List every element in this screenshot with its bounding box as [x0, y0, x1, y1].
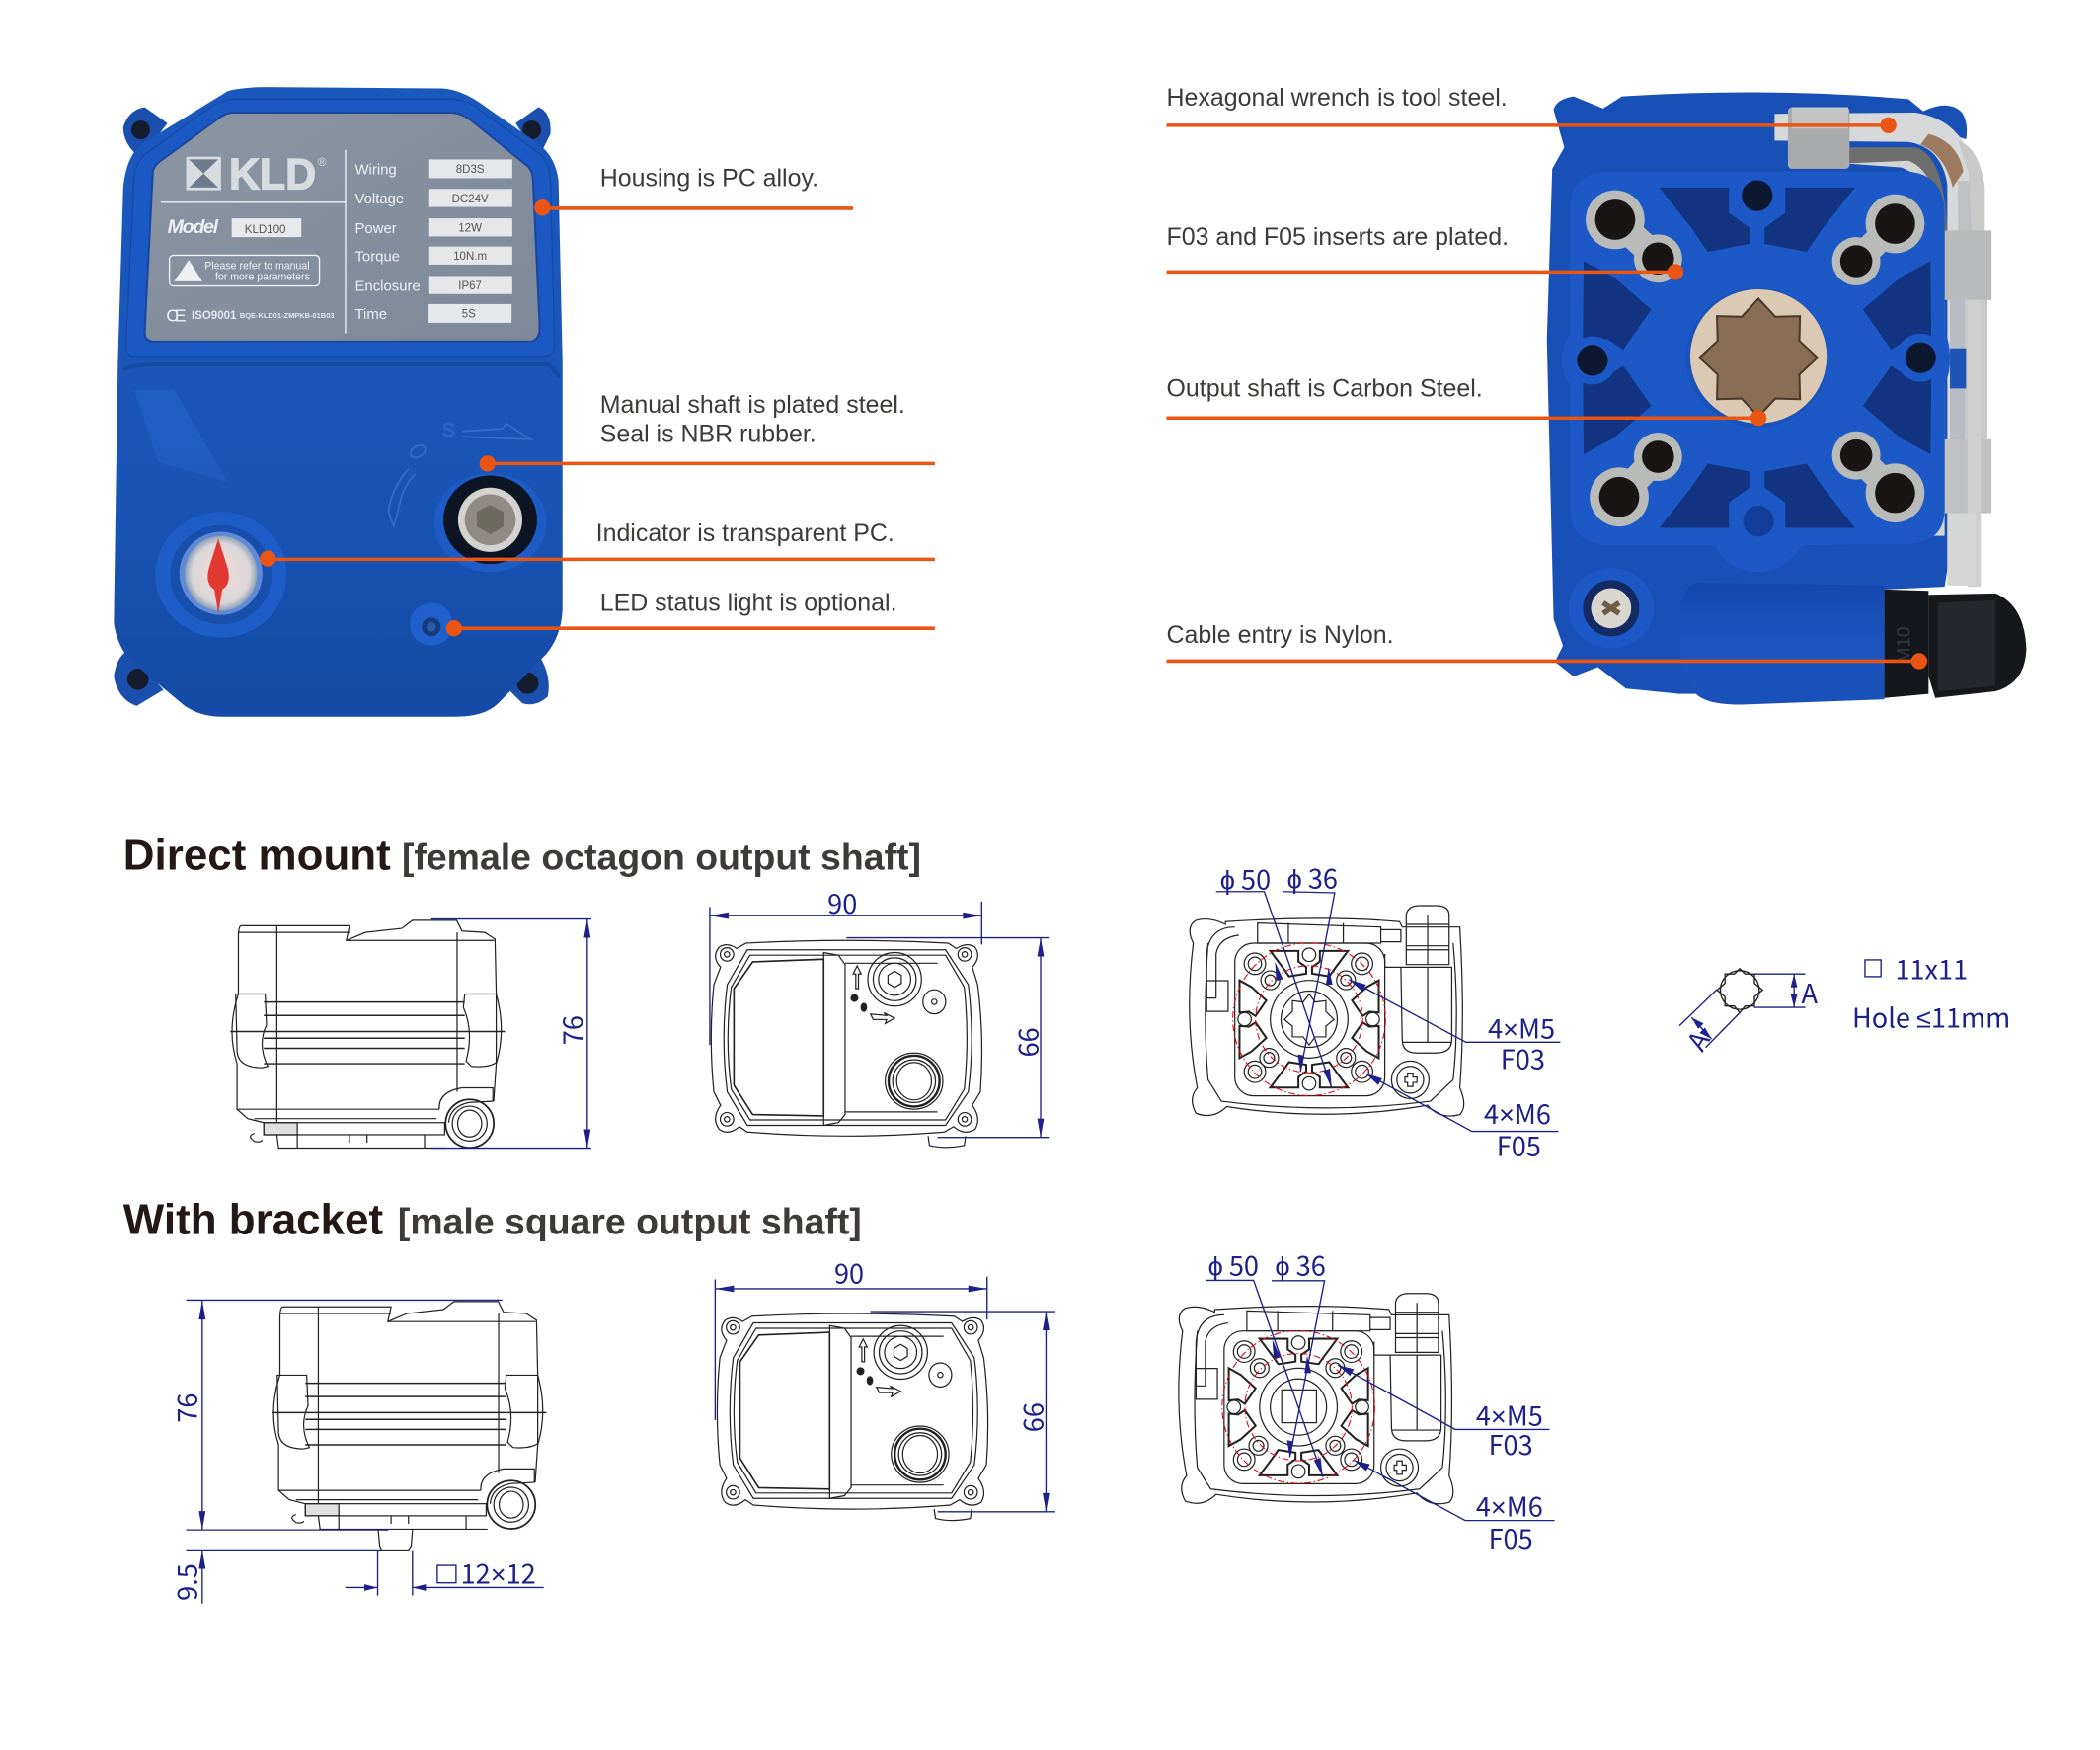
plated inserts [1586, 191, 1924, 526]
callout: output shaft [1167, 375, 1766, 426]
spec: 11x11 hole [1852, 949, 2010, 1035]
parameter table: Voltage [354, 191, 404, 207]
warning box: for more parameters [215, 272, 310, 283]
drawing: bracket bottom view with flange callouts [1179, 1244, 1554, 1556]
callout: housing: Housing is PC alloy. [600, 165, 818, 193]
parameter table: Wiring [354, 161, 397, 178]
drawing: direct mount side view with 76 dimension [230, 919, 591, 1149]
heading: with bracket [123, 1195, 862, 1243]
switch marks [388, 420, 530, 526]
parameter table: 10N.m [453, 251, 487, 263]
drawing: bracket side view with 76, 9.5 and 12×12 dimensions [166, 1300, 546, 1604]
wrench (metal) [1774, 113, 1984, 586]
screw [1568, 568, 1654, 649]
product photo: back of actuator [1547, 93, 2026, 705]
cable entry: M10 [1894, 627, 1914, 663]
parameter table: 12W [458, 223, 482, 235]
drawing: bracket bottom view with flange callouts: F05 [1489, 1518, 1533, 1556]
callout: cable entry: Cable entry is Nylon. [1167, 621, 1394, 649]
drawing: bracket top view with 90 and 66 dimensions: 66 [1013, 1402, 1051, 1432]
axis holes [1568, 172, 1945, 545]
housing body [114, 87, 563, 717]
drawing: direct mount top view with 90 and 66 dimensions [710, 883, 1049, 1148]
heading: direct mount [123, 831, 921, 879]
heading: with bracket: [male square output shaft] [398, 1200, 862, 1241]
drawing: direct mount top view with 90 and 66 dimensions: 90 [827, 883, 857, 921]
diagram: octagon output bore with A dimensions: A [1676, 1022, 1718, 1057]
drawing: bracket side view with 76, 9.5 and 12×12 dimensions: 76 [166, 1393, 204, 1423]
certification row: ISO9001 [192, 310, 237, 322]
model [168, 216, 301, 238]
grey clips [1788, 108, 1991, 587]
heading: direct mount: [female octagon output shaft] [402, 835, 921, 877]
output shaft [1686, 288, 1828, 428]
drawing: bracket top view with 90 and 66 dimensions: 90 [834, 1253, 864, 1292]
drawing: direct mount bottom view with flange callouts: 4×M6 [1484, 1093, 1551, 1132]
product photo: front of actuator [114, 87, 563, 717]
callout: LED [446, 590, 935, 636]
callout: output shaft: Output shaft is Carbon Steel. [1167, 375, 1483, 403]
parameter table: Time [354, 306, 387, 323]
nameplate [145, 113, 540, 342]
spec: 11x11 hole: 11x11 [1895, 949, 1968, 988]
callout: housing [534, 165, 853, 215]
housing back [1547, 93, 1967, 694]
model: Model [168, 216, 219, 238]
housing top band edge [126, 99, 555, 357]
logo: KLD: KLD [229, 149, 316, 199]
drawing: direct mount side view with 76 dimension: 76 [552, 1015, 590, 1045]
drawing: bracket side view with 76, 9.5 and 12×12 dimensions: 9.5 [166, 1563, 204, 1601]
drawing: bracket top view with 90 and 66 dimensions [715, 1253, 1055, 1521]
parameter table: IP67 [458, 280, 482, 292]
drawing: bracket bottom view with flange callouts: 4×M6 [1476, 1486, 1543, 1525]
mounting flange [1562, 172, 1950, 572]
callout: manual shaft [480, 391, 935, 471]
drawing: bracket side view with 76, 9.5 and 12×12 dimensions: 12×12 [461, 1552, 536, 1591]
warning box [170, 255, 320, 286]
parameter table: DC24V [452, 194, 489, 205]
drawing: direct mount bottom view with flange callouts: ϕ 50 [1220, 859, 1271, 898]
callout: indicator: Indicator is transparent PC. [596, 519, 894, 547]
drawing: direct mount top view with 90 and 66 dimensions: 66 [1007, 1027, 1046, 1057]
parameter table: Power [354, 220, 397, 237]
cable entry [1679, 583, 2026, 705]
warning box: Please refer to manual [204, 261, 310, 273]
nameplate dividers [161, 150, 346, 334]
flange central boss [1658, 260, 1856, 455]
callout: LED: LED status light is optional. [600, 590, 897, 617]
logo: KLD: ® [317, 155, 326, 169]
logo: KLD [187, 149, 326, 199]
LED light [410, 602, 452, 646]
callout: indicator [260, 519, 935, 567]
drawing: direct mount bottom view with flange callouts: ϕ 36 [1287, 857, 1338, 896]
drawing: bracket bottom view with flange callouts: ϕ 36 [1275, 1244, 1326, 1283]
diagram: octagon output bore with A dimensions [1676, 969, 1818, 1057]
callout: inserts [1167, 223, 1683, 280]
indicator window [155, 512, 286, 638]
spec: 11x11 hole: Hole ≤11mm [1852, 996, 2010, 1035]
callout: manual shaft: Seal is NBR rubber. [600, 421, 817, 448]
drawing: direct mount bottom view with flange callouts: F05 [1497, 1126, 1541, 1164]
parameter table: 5S [462, 308, 476, 320]
drawing: bracket bottom view with flange callouts: F03 [1489, 1424, 1533, 1463]
manual shaft [434, 473, 546, 572]
certification row [166, 306, 334, 326]
flange windows [1583, 188, 1931, 527]
heading: direct mount: Direct mount [123, 831, 391, 879]
drawing: bracket bottom view with flange callouts: 4×M5 [1476, 1394, 1543, 1433]
drawing: direct mount bottom view with flange callouts: F03 [1501, 1038, 1545, 1076]
certification row: BQE-KLD01-ZMPKB-01B03 [240, 311, 334, 320]
diagram: octagon output bore with A dimensions: A [1801, 973, 1818, 1011]
callout: manual shaft: Manual shaft is plated steel. [600, 391, 905, 419]
switch marks: S [442, 420, 455, 441]
callout: hexagonal wrench [1167, 84, 1897, 133]
callout: cable entry [1167, 621, 1927, 670]
parameter table: Enclosure [354, 278, 421, 294]
drawing: direct mount bottom view with flange callouts [1190, 857, 1560, 1164]
model: KLD100 [245, 224, 285, 236]
callout: hexagonal wrench: Hexagonal wrench is tool steel. [1167, 84, 1508, 112]
icon: mounting ears [114, 108, 551, 706]
parameter table: Torque [354, 249, 400, 266]
heading: with bracket: With bracket [123, 1195, 383, 1243]
callout: inserts: F03 and F05 inserts are plated. [1167, 223, 1509, 251]
drawing: bracket bottom view with flange callouts: ϕ 50 [1208, 1244, 1259, 1283]
certification row: CE [166, 306, 187, 326]
drawing: direct mount bottom view with flange callouts: 4×M5 [1488, 1007, 1555, 1046]
parameter table: 8D3S [456, 164, 485, 176]
parameter table [354, 159, 512, 323]
